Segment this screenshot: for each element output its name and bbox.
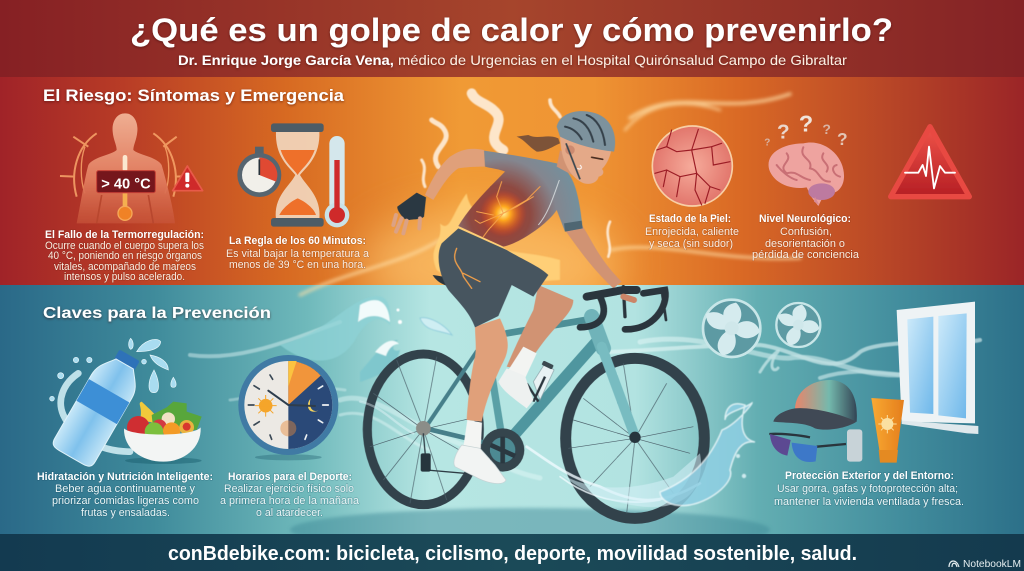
bike front wheel	[566, 358, 704, 518]
text: thermoregulation failure: intensos y pulso acelerado.	[64, 271, 185, 283]
title: ¿Qué es un golpe de calor y cómo prevenirlo?	[130, 12, 893, 48]
icon: window	[897, 302, 978, 434]
footer text: conBdebike.com: bicicleta, ciclismo, deporte, movilidad sostenible, salud.	[168, 543, 857, 565]
fingers	[393, 215, 420, 233]
icon: cracked skin	[652, 126, 732, 206]
text: hydration and nutrition	[37, 471, 213, 519]
text: hydration and nutrition: Beber agua continuamente y	[55, 483, 195, 495]
icon: brain with question marks: ?	[764, 138, 770, 149]
icon: left ocean waves	[280, 296, 452, 382]
helmet strap	[566, 143, 580, 179]
icon: day and night clock	[238, 355, 338, 460]
text: outdoor protection: Usar gorra, gafas y fotoprotección alta;	[777, 483, 958, 495]
ponytail	[517, 135, 560, 152]
heading: risk section: El Riesgo: Síntomas y Emergencia	[43, 86, 345, 105]
icon: brain with question marks: ?	[777, 120, 790, 143]
text: skin state	[645, 213, 739, 250]
water swirl	[360, 402, 700, 502]
sleeve cuff	[564, 221, 583, 232]
heat glow behind cyclist	[360, 210, 620, 320]
text: 60 minute rule: Es vital bajar la temperatura a	[226, 248, 370, 260]
bike frame	[416, 317, 641, 447]
face	[560, 133, 612, 184]
far arm	[565, 226, 622, 288]
far leg	[498, 285, 573, 408]
text: hydration and nutrition: frutas y ensaladas.	[81, 507, 170, 519]
footer band	[0, 534, 1024, 571]
text: outdoor protection: Protección Exterior y del Entorno:	[785, 470, 954, 482]
icon: front wheel water splash	[660, 403, 755, 506]
heat streaks	[300, 94, 800, 295]
smoke wisps	[422, 93, 610, 257]
icon: brain with question marks: ?	[799, 111, 813, 137]
bike rear wheel	[367, 354, 479, 505]
text: hydration and nutrition: Hidratación y Nutrición Inteligente:	[37, 471, 213, 483]
icon: water bottle	[50, 338, 176, 469]
text: outdoor protection: mantener la vivienda ventilada y fresca.	[774, 496, 964, 508]
shorts	[439, 228, 548, 327]
text: thermoregulation failure	[45, 229, 204, 283]
near leg	[454, 318, 508, 484]
heat veins	[475, 182, 540, 237]
flames	[433, 193, 560, 287]
text: skin state: Enrojecida, caliente	[645, 226, 739, 238]
text: sport schedules	[220, 471, 360, 519]
icon: brain with question marks	[764, 111, 848, 206]
saddle	[433, 275, 470, 290]
drivetrain	[421, 428, 524, 477]
text: sport schedules: o al atardecer.	[256, 507, 323, 519]
helmet vents	[565, 115, 605, 145]
text: outdoor protection	[774, 470, 964, 508]
heading: prevention section: Claves para la Prevención	[43, 305, 271, 322]
text: thermoregulation failure: Ocurre cuando el cuerpo supera los	[45, 240, 204, 252]
jersey	[458, 151, 583, 247]
text: neurological level	[752, 213, 860, 261]
text: thermoregulation failure: vitales, acompañado de mareos	[54, 261, 196, 273]
text: neurological level: desorientación o	[765, 238, 845, 250]
text: neurological level: pérdida de conciencia	[752, 249, 860, 261]
icon: ECG warning triangle	[891, 127, 969, 197]
text: 60 minute rule: menos de 39 °C en una hora.	[229, 259, 366, 271]
text: thermoregulation failure: El Fallo de la Termorregulación:	[45, 229, 204, 241]
handlebar	[580, 287, 666, 329]
water bottle	[527, 360, 554, 402]
icon: cap	[773, 380, 857, 430]
text: sport schedules: a primera hora de la mañana	[220, 495, 360, 507]
background: heat band	[0, 76, 1024, 286]
neck	[557, 150, 578, 178]
text: skin state: y seca (sin sudor)	[649, 238, 733, 250]
wind and water streaks	[190, 322, 980, 478]
text: 60 minute rule: La Regla de los 60 Minutos:	[229, 235, 366, 247]
text: sport schedules: Realizar ejercicio físico solo	[224, 483, 354, 495]
icon: salad bowl	[124, 402, 202, 464]
text: sport schedules: Horarios para el Deporte:	[228, 471, 352, 483]
icon: fans	[703, 300, 820, 357]
icon: brain with question marks: ?	[822, 121, 831, 137]
text: thermoregulation failure: 40 °C, poniendo en riesgo órganos	[48, 250, 202, 262]
cyclist illustration	[360, 93, 704, 518]
near arm	[425, 149, 485, 200]
background: cool band	[0, 285, 1024, 535]
icon: thermometer	[325, 136, 349, 227]
text: hydration and nutrition: priorizar comidas ligeras como	[52, 495, 199, 507]
icon: warning triangle	[173, 166, 203, 191]
icon: overheated body: > 40 °C	[101, 176, 151, 192]
icon: deodorant cylinder	[847, 429, 862, 462]
text: neurological level: Nivel Neurológico:	[759, 213, 851, 225]
helmet	[557, 111, 615, 152]
icon: brain with question marks: ?	[837, 129, 848, 149]
subtitle: Dr. Enrique Jorge García Vena, médico de Urgencias en el Hospital Quirónsalud Campo de Gibraltar	[178, 52, 847, 68]
icon: overheated body	[60, 113, 190, 223]
NotebookLM mark: NotebookLM	[963, 559, 1021, 570]
glove	[397, 193, 426, 221]
shorts lightning	[455, 248, 480, 288]
text: skin state: Estado de la Piel:	[649, 213, 731, 225]
icon: sunglasses	[769, 434, 846, 462]
core heat glow	[480, 190, 527, 237]
icon: stopwatch	[237, 147, 281, 197]
icon: sunscreen tube	[871, 398, 904, 463]
ground shade	[290, 508, 770, 552]
icon: hourglass	[271, 123, 324, 227]
text: neurological level: Confusión,	[780, 226, 832, 238]
title band	[0, 0, 1024, 77]
text: 60 minute rule	[226, 235, 370, 271]
